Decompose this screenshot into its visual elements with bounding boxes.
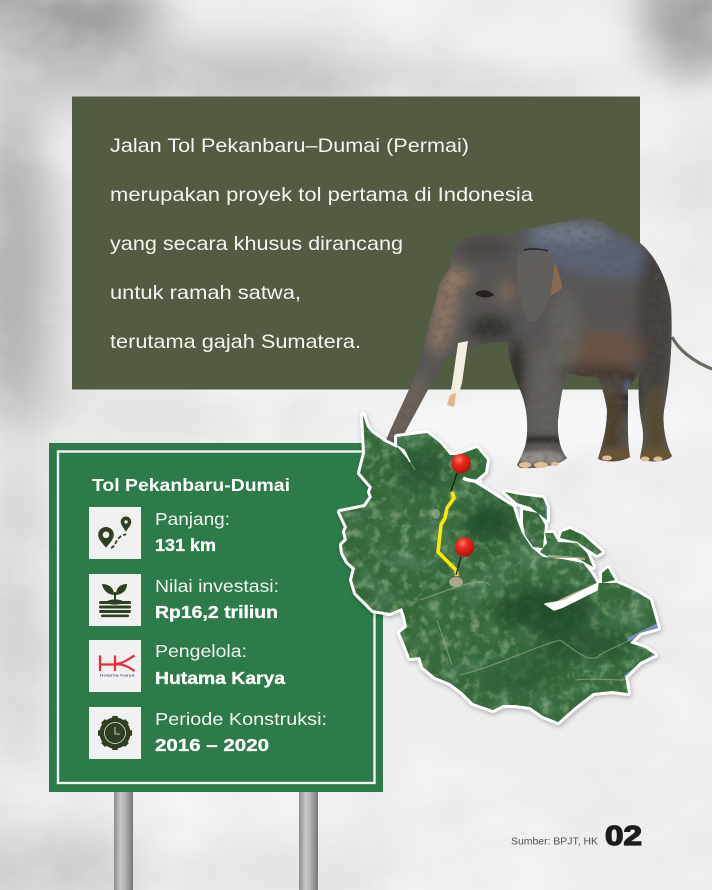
item: nilai investasi (89, 574, 279, 626)
intro paragraph: untuk ramah satwa, (110, 282, 301, 304)
ear (517, 250, 562, 322)
elephant illustration (373, 210, 712, 472)
poles of road sign (114, 790, 318, 890)
map white outline (340, 415, 658, 722)
intro paragraph: terutama gajah Sumatera. (110, 331, 361, 353)
icon: Hutama Karya logo: Hutama Karya (100, 674, 135, 678)
intro paragraph: yang secara khusus dirancang (110, 233, 403, 255)
elephant body (386, 218, 672, 468)
intro paragraph: merupakan proyek tol pertama di Indonesia (110, 184, 533, 206)
label: nilai investasi: Nilai investasi: (155, 576, 279, 596)
eye (475, 290, 494, 298)
item: periode konstruksi (89, 707, 327, 759)
pin: Dumai (451, 454, 471, 491)
label: pengelola: Pengelola: (155, 641, 247, 661)
panel: introduction (72, 96, 640, 390)
toenails (519, 456, 662, 468)
tusk (447, 341, 468, 407)
highway route (438, 492, 457, 576)
map inner gaps (397, 446, 598, 610)
source note: Sumber: BPJT, HK (511, 836, 598, 848)
intro paragraph (110, 135, 533, 353)
value: panjang: 131 km (155, 535, 216, 555)
tail (672, 337, 712, 369)
icon: coins and sprout (99, 584, 131, 617)
pin: Pekanbaru (455, 537, 474, 575)
road sign panel (49, 443, 383, 792)
item: pengelola (89, 640, 285, 692)
satellite map of Riau (335, 410, 665, 730)
label: panjang: Panjang: (155, 509, 230, 529)
sign title: Tol Pekanbaru-Dumai (92, 475, 290, 495)
value: periode konstruksi: 2016 – 2020 (155, 735, 269, 755)
intro paragraph: Jalan Tol Pekanbaru–Dumai (Permai) (110, 135, 469, 157)
map land texture (335, 410, 665, 730)
item: panjang (89, 507, 230, 559)
page number: 02 (605, 820, 642, 851)
icon: route pins (98, 516, 131, 548)
label: periode konstruksi: Periode Konstruksi: (155, 709, 327, 729)
icon: Hutama Karya logo (100, 656, 135, 678)
icon: gear with clock (98, 716, 132, 750)
value: nilai investasi: Rp16,2 triliun (155, 602, 278, 622)
value: pengelola: Hutama Karya (155, 668, 285, 688)
